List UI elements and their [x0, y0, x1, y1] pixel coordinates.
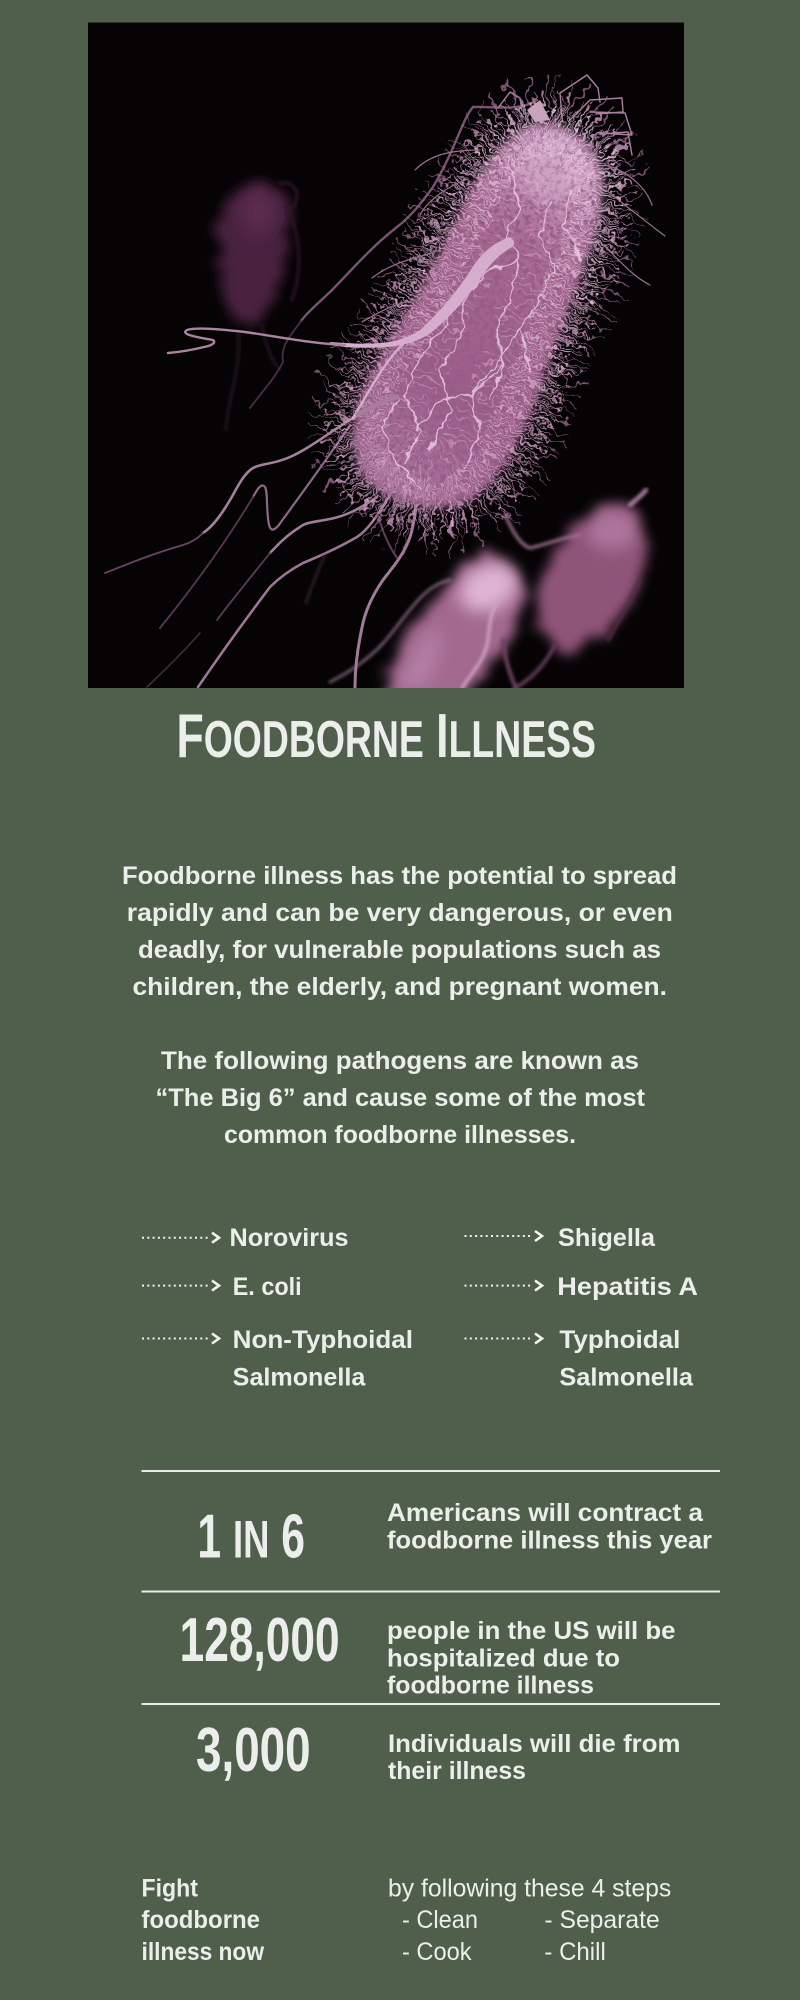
pathogen: Norovirus: [142, 1224, 348, 1252]
image: pink bacteria micrograph: [88, 22, 684, 700]
pathogen: Shigella: Shigella: [558, 1224, 656, 1252]
four steps: - Clean: [402, 1906, 478, 1934]
stat: 3,000: 3,000: [196, 1716, 311, 1785]
four steps: - Separate: [544, 1906, 660, 1934]
cell body: [354, 124, 603, 507]
pathogen: Non-Typhoidal Salmonella: Salmonella: [233, 1364, 366, 1392]
long flagellum leftward: [168, 329, 345, 353]
four steps: - Chill: [544, 1938, 606, 1966]
intro paragraph: rapidly and can be very dangerous, or even: [127, 899, 673, 927]
pathogen: Typhoidal Salmonella: [464, 1326, 694, 1392]
thick flagellum over body: [330, 237, 514, 348]
right lower bacterium: [505, 490, 647, 688]
big 6 paragraph: [156, 1047, 646, 1149]
stat: 1 in 6: Americans will contract a: [387, 1499, 704, 1527]
outer fur: [360, 128, 598, 503]
side long hairs: [362, 150, 665, 322]
four steps: [388, 1874, 671, 1966]
flagella: [105, 100, 537, 687]
title: FOODBORNE ILLNESS: [176, 702, 596, 771]
stub flagellum: [358, 397, 397, 414]
stat: 128,000: [180, 1606, 676, 1700]
call to action: Fight: [142, 1874, 199, 1902]
stat: 128,000: people in the US will be: [387, 1617, 676, 1645]
pathogen: Non-Typhoidal Salmonella: [142, 1326, 413, 1392]
call to action: illness now: [142, 1938, 264, 1966]
intro paragraph: Foodborne illness has the potential to spread: [122, 862, 677, 890]
stat: 1 in 6: [197, 1499, 712, 1572]
bottom front bacterium: [330, 555, 524, 700]
main bacterium: [168, 75, 665, 507]
call to action: [142, 1874, 264, 1966]
stat: 3,000: Individuals will die from: [388, 1730, 680, 1758]
stat: 1 in 6: foodborne illness this year: [387, 1527, 712, 1555]
big 6 paragraph: “The Big 6” and cause some of the most: [156, 1084, 646, 1112]
four steps: by following these 4 steps: [388, 1874, 671, 1902]
intro paragraph: children, the elderly, and pregnant women.: [132, 973, 667, 1001]
pathogen: Shigella: [464, 1224, 656, 1252]
stat: 3,000: [196, 1716, 680, 1785]
four steps: - Cook: [402, 1938, 472, 1966]
pathogen: Non-Typhoidal Salmonella: Non-Typhoidal: [233, 1326, 413, 1354]
inner hair streaks: [395, 150, 561, 470]
pathogen: Hepatitis A: Hepatitis A: [557, 1273, 698, 1301]
pathogen: Hepatitis A: [464, 1273, 698, 1301]
bright cap highlight: [514, 136, 590, 204]
stat: 1 in 6: 1 IN 6: [197, 1503, 305, 1572]
faint background bacterium: [218, 180, 299, 430]
pathogen: Typhoidal Salmonella: Typhoidal: [559, 1326, 680, 1354]
edge flagellum: [353, 340, 407, 418]
mid fur: [360, 128, 598, 503]
stat: 128,000: hospitalized due to: [387, 1644, 620, 1672]
pathogen: E. coli: [142, 1273, 302, 1301]
upper right loops: [498, 75, 632, 155]
stat: 128,000: 128,000: [180, 1606, 340, 1675]
surface veins: [380, 170, 580, 490]
call to action: foodborne: [142, 1906, 260, 1934]
stat: 128,000: foodborne illness: [387, 1672, 594, 1700]
big 6 paragraph: The following pathogens are known as: [161, 1047, 639, 1075]
stat: 3,000: their illness: [388, 1757, 526, 1785]
top stub: [527, 100, 550, 122]
long outer fur: [360, 128, 598, 503]
pathogen: E. coli: E. coli: [233, 1273, 302, 1301]
big 6 paragraph: common foodborne illnesses.: [224, 1121, 576, 1149]
pathogen: Typhoidal Salmonella: Salmonella: [559, 1364, 694, 1392]
intro paragraph: deadly, for vulnerable populations such as: [138, 936, 661, 964]
pathogen: Norovirus: Norovirus: [230, 1224, 348, 1252]
intro paragraph: [122, 862, 677, 1001]
